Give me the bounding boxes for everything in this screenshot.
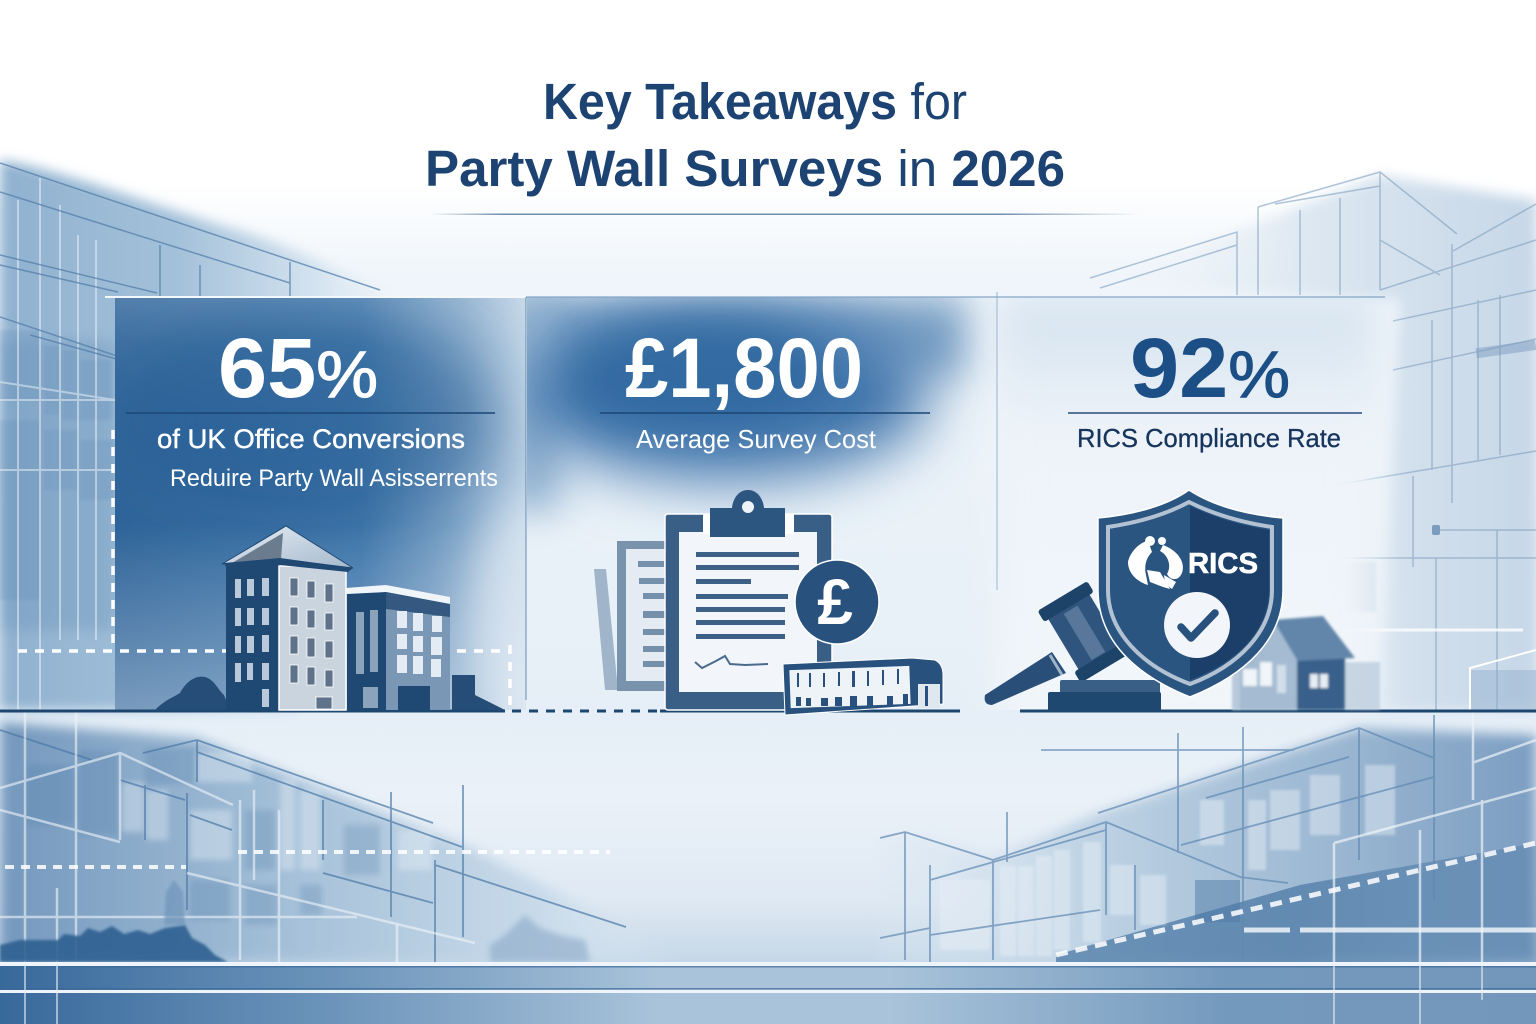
stat label: compliance: RICS Compliance Rate: [1077, 423, 1341, 453]
title: Party Wall Surveys in 2026: [425, 140, 1065, 197]
stat: 65%: 65%: [218, 321, 378, 415]
background buildings: top right: [1090, 172, 1536, 710]
title: Key Takeaways for: [543, 73, 967, 130]
tall building windows: [235, 578, 269, 707]
icon: gavel: [985, 581, 1161, 711]
dashed and solid ledge line: [1244, 928, 1536, 932]
panel: left stat shading: [115, 298, 526, 710]
background buildings: bottom left: [0, 710, 680, 1024]
paper: [679, 532, 817, 692]
stat label: office conversions: of UK Office Conversions: [157, 424, 465, 454]
tall building roof: [222, 526, 353, 568]
check badge: [1164, 592, 1230, 658]
stat: £1,800: £1,800: [625, 321, 863, 415]
panel: right stat shading: [1000, 297, 1375, 737]
stat: 65%: [157, 321, 465, 454]
skyline silhouette far: [490, 915, 590, 962]
back sheet: [617, 541, 677, 691]
tall building light face: [279, 566, 346, 710]
skyline silhouette: [0, 925, 228, 962]
stat: £1,800: [625, 321, 877, 454]
stat label: survey cost: Average Survey Cost: [636, 424, 877, 454]
pound coin: [795, 560, 879, 644]
bottom band: [0, 962, 1536, 1024]
stat: 92%: 92%: [1130, 321, 1290, 415]
tape measure: [783, 658, 943, 715]
panel rules: [0, 214, 1536, 711]
title: [425, 73, 1065, 197]
back sheet pale: [594, 569, 618, 690]
skyline tower: [164, 880, 185, 925]
stat: 92%: [1077, 321, 1341, 453]
clip: [703, 514, 715, 534]
panel: middle stat shading: [500, 290, 967, 510]
icon: office buildings: [155, 526, 505, 710]
stat sublabel: party wall: Reduire Party Wall Asisserrents: [170, 465, 498, 492]
clipboard board: [665, 514, 832, 710]
icon: small house: [1232, 616, 1380, 710]
icon: clipboard with costing: [594, 490, 943, 715]
icon: clipboard with costing: £: [817, 566, 853, 638]
low building: [347, 592, 387, 710]
signature: [695, 656, 768, 668]
background buildings: bottom right: [880, 710, 1536, 1024]
background buildings: top left: [0, 160, 400, 710]
dashed diagonal line: [1056, 843, 1536, 955]
tall building dark face: [226, 565, 280, 710]
RICS logo mark: [1128, 536, 1183, 589]
RICS wordmark: RICS: [1188, 548, 1258, 580]
shrubs: [155, 675, 505, 710]
icon: RICS shield: [1098, 490, 1283, 697]
dashed lines: [5, 852, 610, 867]
